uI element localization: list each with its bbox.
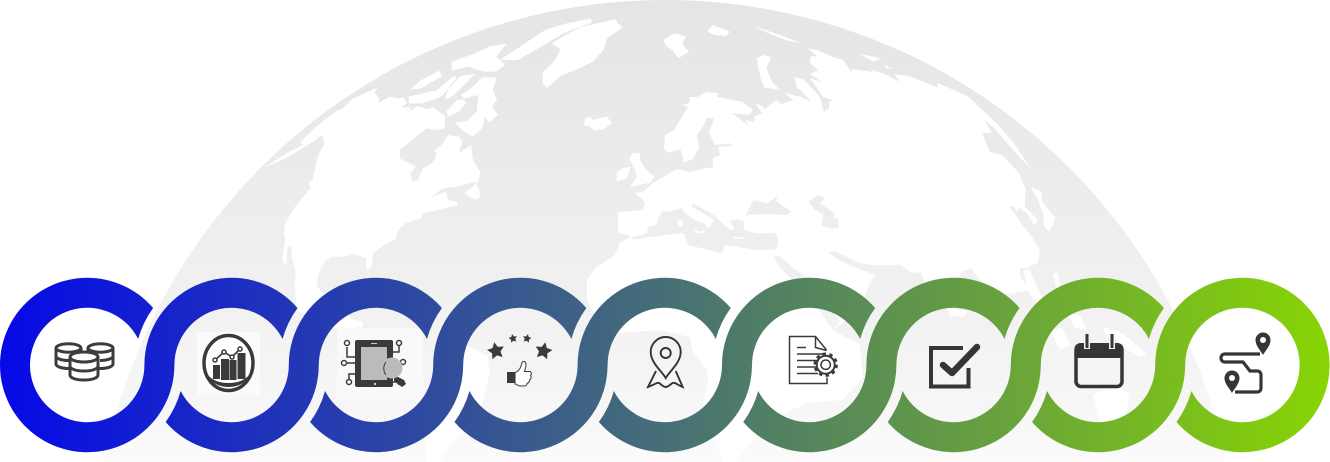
ring band 5 [599,278,875,452]
icon: stars and thumbs up [486,333,554,386]
ring band 2 [166,278,442,452]
ring band 4 [454,278,731,452]
ring band 1 [0,278,298,452]
arctic russian islands and japan [663,25,1055,232]
ring band 6 [743,278,1020,452]
icon backing boxes [197,328,423,400]
icon: document with gear [790,336,837,384]
continent: south america [425,330,490,462]
icon: route with two pins [1221,333,1270,393]
continent: canadian arctic and greenland [409,18,623,137]
mediterranean islands and italy [678,206,744,239]
ring band 8 [1032,278,1330,452]
southeast asia and australia patches [947,270,1147,422]
icon: checkbox [931,347,977,386]
icon: analytics chart in circle [204,336,253,390]
british isles [617,153,654,187]
icon: tablet with magnifier and circuit [342,340,406,387]
continent: north america [264,87,480,328]
ring band 3 [310,278,586,452]
inland seas [631,195,840,330]
caribbean patch [347,318,363,328]
icon: calendar [1074,334,1124,386]
icon: map pin [648,337,683,387]
ring band 7 [888,278,1164,452]
icon: database [56,344,113,380]
continent: eurasia and africa [587,48,1040,462]
ring chain [0,278,1330,452]
globe background [117,0,1214,414]
